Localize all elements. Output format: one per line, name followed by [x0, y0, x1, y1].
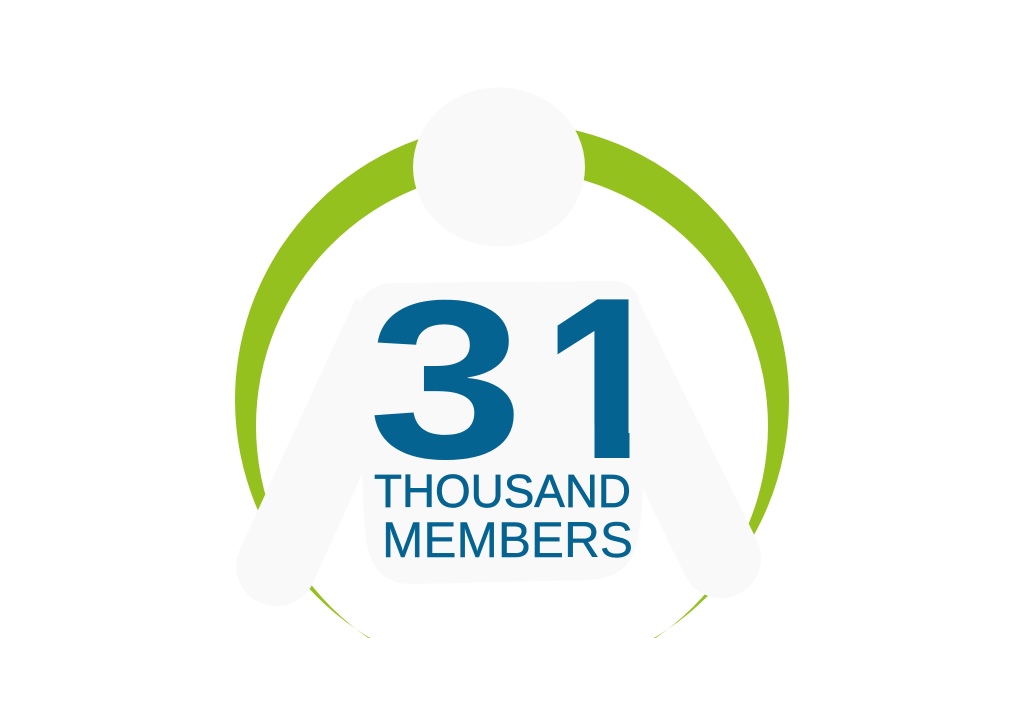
headline number 31 [374, 299, 630, 460]
icon: person head [413, 88, 585, 246]
green crescent ring [200, 123, 824, 698]
icon: person right arm [590, 300, 761, 598]
label: members: MEMBERS [382, 512, 633, 568]
label: thousand: THOUSAND [374, 465, 631, 517]
headline number 31: 1 [544, 252, 668, 506]
icon: person torso [356, 281, 643, 584]
icon: person left arm [236, 298, 420, 606]
person figure [236, 88, 761, 606]
infographic: 31 thousand members [235, 130, 789, 638]
headline number 31: 3 [368, 253, 524, 505]
